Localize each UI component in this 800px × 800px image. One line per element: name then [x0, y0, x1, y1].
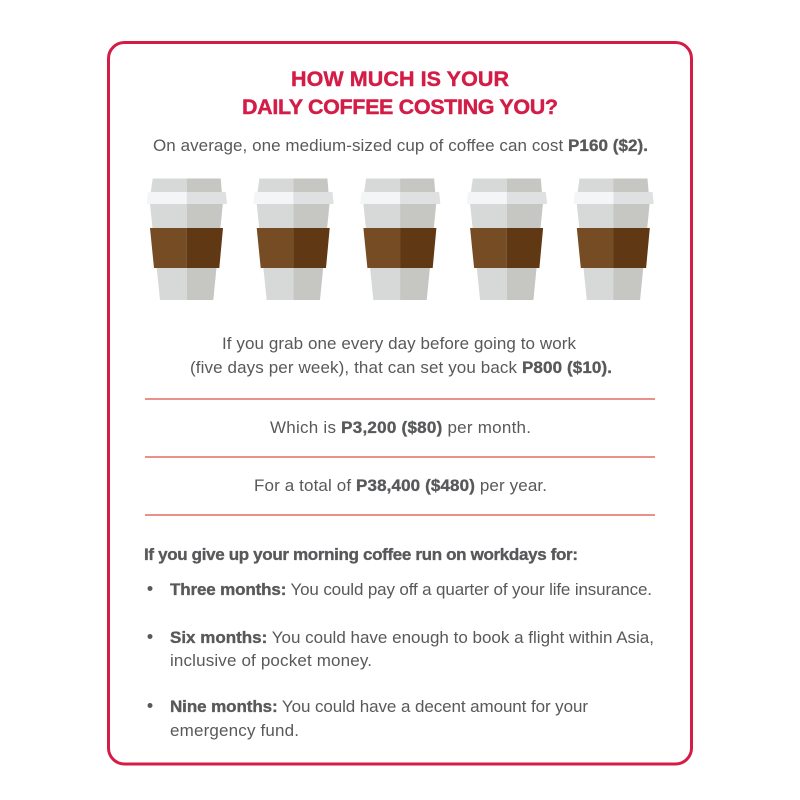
icon: coffee cup 1 — [147, 178, 227, 300]
icon row: five coffee cups — [147, 178, 654, 300]
list item: nine months: Nine months: You could have a decent amount for your — [170, 697, 588, 716]
list item: three months: Three months: You could pay off a quarter of your life insurance. — [170, 580, 652, 599]
text: average cup cost: On average, one medium-sized cup of coffee can cost P160 ($2). — [153, 136, 648, 155]
list item: six months: inclusive of pocket money. — [170, 651, 372, 670]
list item: nine months — [148, 697, 588, 740]
text: yearly cost: For a total of P38,400 ($480) per year. — [254, 476, 547, 495]
text: weekly cost: If you grab one every day before going to work — [222, 334, 576, 353]
icon: coffee cup 3 — [360, 178, 440, 300]
list item: nine months: emergency fund. — [170, 721, 299, 740]
text: weekly cost: (five days per week), that can set you back P800 ($10). — [190, 358, 612, 377]
list item: six months — [148, 628, 654, 670]
list item: six months: Six months: You could have enough to book a flight within Asia, — [170, 628, 654, 647]
icon: coffee cup 5 — [574, 178, 654, 300]
subheading: give up coffee: If you give up your morning coffee run on workdays for: — [144, 545, 578, 564]
panel: rounded card border — [108, 42, 692, 764]
list: savings benefits — [148, 580, 654, 740]
text: monthly cost: Which is P3,200 ($80) per month. — [270, 418, 531, 437]
title: HOW MUCH IS YOUR — [291, 67, 509, 91]
text: weekly cost — [190, 334, 612, 377]
icon: coffee cup 4 — [467, 178, 547, 300]
icon: coffee cup 2 — [253, 178, 334, 300]
title: DAILY COFFEE COSTING YOU? — [242, 95, 558, 119]
title — [242, 67, 558, 119]
